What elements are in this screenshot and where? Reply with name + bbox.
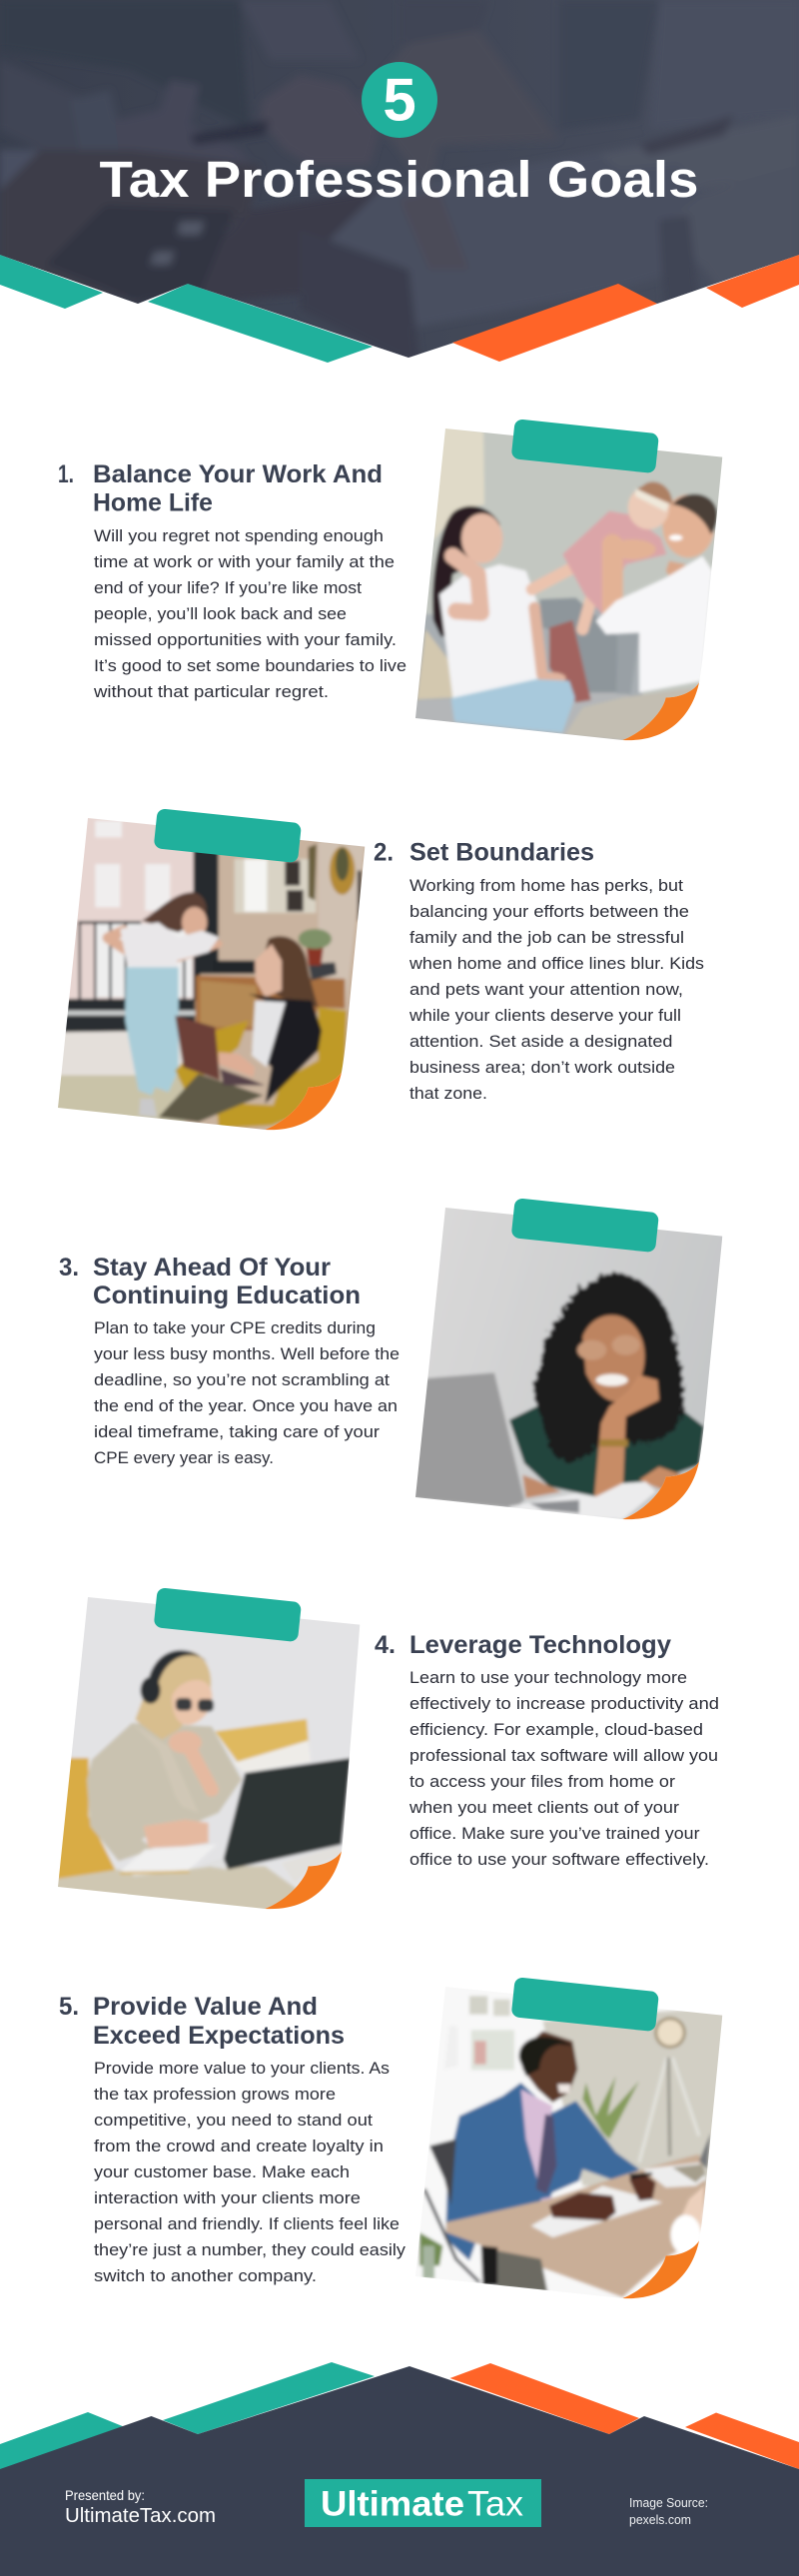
goal 1 body text: end of your life? If you’re like most: [94, 579, 362, 597]
header banner: [0, 0, 799, 380]
goal 1 photo: family on sofa: [415, 420, 723, 741]
goal 5 body text: they’re just a number, they could easily: [94, 2241, 406, 2259]
goal 4 body text: [408, 1669, 719, 1869]
goal 3 heading: 3.: [59, 1254, 79, 1282]
goal 5 body text: the tax profession grows more: [94, 2086, 336, 2104]
goal 2 body text: while your clients deserve your full: [408, 1007, 681, 1025]
presented by: UltimateTax.com: [65, 2505, 216, 2527]
goal 4 body text: effectively to increase productivity and: [409, 1695, 719, 1713]
goal 2 body text: Working from home has perks, but: [409, 877, 683, 895]
goal 2 photo: mother working, child interrupting: [58, 809, 366, 1131]
goal 4 body text: professional tax software will allow you: [409, 1747, 718, 1765]
goal 1 body text: people, you’ll look back and see: [94, 605, 347, 623]
goal 2 body text: when home and office lines blur. Kids: [408, 955, 704, 973]
goal 1 heading: [58, 460, 383, 517]
goal 1 body text: without that particular regret.: [93, 683, 329, 701]
goal 5 heading: Exceed Expectations: [93, 2022, 345, 2050]
image source: [629, 2495, 708, 2527]
goal 2 heading: 2.: [374, 839, 394, 867]
goal 3 body text: deadline, so you’re not scrambling at: [94, 1371, 390, 1389]
goal 5 heading: Provide Value And: [93, 1993, 318, 2021]
goal 3 body text: your less busy months. Well before the: [94, 1345, 400, 1363]
goal 4 body text: to access your files from home or: [409, 1773, 676, 1791]
goal 5 body text: switch to another company.: [94, 2267, 317, 2285]
goal 3 heading: Stay Ahead Of Your: [93, 1254, 331, 1282]
goal 1 body text: It’s good to set some boundaries to live: [94, 657, 406, 675]
goal 1 panel: [58, 415, 736, 747]
footer: [0, 2362, 799, 2576]
goal 5 heading: 5.: [59, 1993, 79, 2021]
page-curl accent: [622, 682, 699, 740]
footer background: [0, 2366, 799, 2576]
header accent: orange stripe right: [706, 255, 799, 308]
tape: [154, 1587, 302, 1642]
title: Tax Professional Goals: [100, 151, 699, 208]
goal 5 body text: from the crowd and create loyalty in: [94, 2138, 384, 2155]
goal 2 body text: that zone.: [409, 1085, 487, 1103]
presented by: [65, 2487, 216, 2527]
header photo background: [0, 0, 799, 380]
goal 3 photo: smiling woman at laptop: [415, 1199, 723, 1520]
footer accent: orange stripe right: [685, 2413, 799, 2469]
tape: [511, 419, 659, 473]
goal 4 panel: [45, 1583, 719, 1916]
tape: [154, 808, 302, 863]
page-curl accent: [265, 1851, 342, 1909]
goal 4 heading: 4.: [375, 1631, 396, 1659]
goal 2 body text: balancing your efforts between the: [409, 903, 689, 921]
goal 5 body text: [94, 2060, 406, 2285]
goal 2 heading: Set Boundaries: [409, 839, 594, 867]
goal 2 body text: family and the job can be stressful: [409, 929, 684, 947]
tape: [511, 1977, 659, 2032]
goal 3 body text: ideal timeframe, taking care of your: [94, 1423, 381, 1441]
number badge: [362, 62, 437, 138]
goal 1 body text: [93, 527, 406, 701]
logo: Ultimate: [321, 2485, 464, 2523]
goal 2 body text: and pets want your attention now,: [409, 981, 683, 999]
logo: [305, 2479, 541, 2527]
page-curl accent: [265, 1072, 342, 1130]
goal 4 heading: Leverage Technology: [409, 1631, 671, 1659]
goal 4 body text: Learn to use your technology more: [409, 1669, 687, 1687]
goal 3 heading: [59, 1254, 361, 1309]
goal 3 body text: the end of the year. Once you have an: [94, 1397, 398, 1415]
goal 5 body text: competitive, you need to stand out: [94, 2112, 373, 2130]
goal 4 body text: efficiency. For example, cloud-based: [409, 1721, 703, 1739]
goal 5 photo: businessman at desk: [416, 1978, 723, 2299]
goal 3 body text: [94, 1319, 400, 1467]
goal 5 body text: Provide more value to your clients. As: [94, 2060, 390, 2078]
goal 3 heading: Continuing Education: [93, 1282, 361, 1309]
goal 3 panel: [59, 1194, 736, 1526]
goal 4 photo: woman with headphones and laptop: [58, 1588, 360, 1910]
goal 1 body text: time at work or with your family at the: [94, 553, 395, 571]
goal 1 body text: missed opportunities with your family.: [94, 631, 397, 649]
goal 4 body text: office. Make sure you’ve trained your: [409, 1825, 700, 1843]
page-curl accent: [622, 2240, 699, 2298]
goal 1 heading: Balance Your Work And: [93, 460, 383, 488]
footer accent: teal stripe left: [0, 2412, 125, 2477]
goal 4 body text: office to use your software effectively.: [409, 1851, 709, 1869]
goal 1 heading: Home Life: [93, 489, 213, 517]
image source: Image Source:: [629, 2495, 708, 2510]
goal 1 heading: 1.: [58, 460, 74, 488]
image source: pexels.com: [629, 2512, 691, 2527]
goal 4 body text: when you meet clients out of your: [408, 1799, 680, 1817]
goal 5 heading: [59, 1993, 345, 2050]
goal 5 body text: personal and friendly. If clients feel like: [94, 2215, 400, 2233]
goal 2 body text: business area; don’t work outside: [409, 1059, 675, 1077]
goal 5 panel: [59, 1973, 736, 2305]
goal 5 body text: interaction with your clients more: [94, 2189, 361, 2207]
header accent: teal stripe left: [0, 255, 103, 309]
header accent: orange stripe centre: [452, 284, 657, 362]
goal 1 body text: Will you regret not spending enough: [94, 527, 384, 545]
goal 3 body text: Plan to take your CPE credits during: [94, 1319, 376, 1337]
goal 5 body text: your customer base. Make each: [94, 2163, 350, 2181]
footer accent: orange stripe centre: [449, 2363, 639, 2434]
footer accent: teal stripe centre: [163, 2362, 375, 2434]
goal 2 body text: [408, 877, 704, 1103]
goal 3 body text: CPE every year is easy.: [94, 1449, 274, 1467]
header accent: teal stripe centre: [148, 284, 373, 363]
page-curl accent: [622, 1461, 699, 1519]
tape: [511, 1198, 659, 1253]
presented by: Presented by:: [65, 2487, 145, 2503]
goal 2 panel: [45, 804, 704, 1137]
goal 2 body text: attention. Set aside a designated: [409, 1033, 673, 1051]
logo: Tax: [467, 2485, 524, 2523]
number badge: 5: [383, 66, 416, 134]
